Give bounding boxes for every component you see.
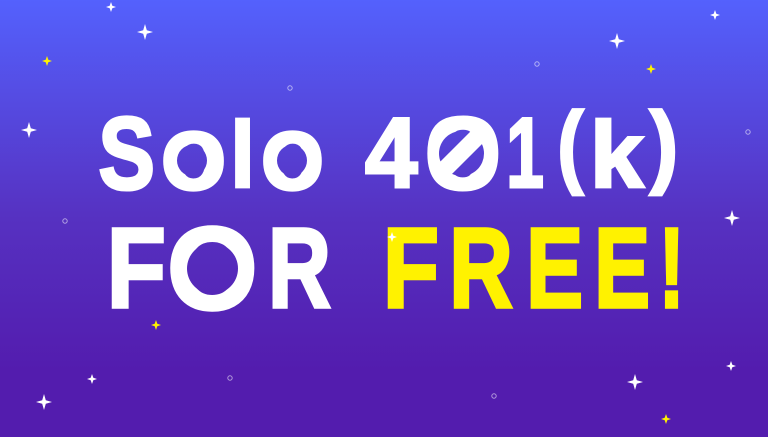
title line: Solo 401(k): o: [261, 94, 324, 212]
title line: Solo 401(k): l: [230, 103, 255, 208]
title word: FREE!: E: [526, 205, 583, 332]
decorative yellow sparkles: [42, 56, 671, 424]
title word: FREE!: R: [449, 204, 513, 332]
title word: FREE!: !: [659, 204, 684, 332]
title word: FREE!: [383, 204, 684, 332]
small sparkle over the F: [387, 232, 397, 242]
title line: Solo 401(k): [98, 93, 678, 212]
title word: FOR: O: [167, 204, 257, 334]
title word: FOR: [107, 204, 331, 334]
title line: Solo 401(k): 1: [506, 97, 544, 208]
title line: Solo 401(k): 4: [365, 98, 418, 208]
title word: FOR: R: [268, 205, 331, 332]
title line: Solo 401(k): ): [650, 93, 678, 196]
title line: Solo 401(k): k: [590, 103, 645, 208]
title word: FOR: F: [107, 206, 166, 332]
title line: Solo 401(k): (: [557, 94, 584, 196]
title line: Solo 401(k): 0: [424, 97, 502, 212]
title line: Solo 401(k): S: [98, 96, 155, 211]
title line: Solo 401(k): o: [161, 93, 226, 212]
decorative small rings: [63, 62, 750, 398]
title word: FREE!: F: [383, 205, 439, 331]
title word: FREE!: E: [594, 206, 650, 332]
